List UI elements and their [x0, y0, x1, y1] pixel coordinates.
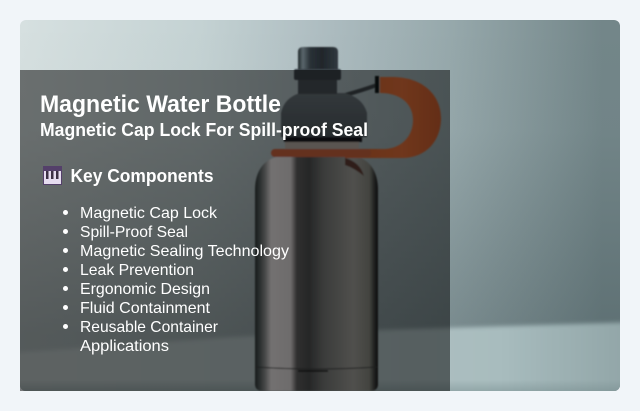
- bullet list: Reusable Container: [80, 319, 219, 336]
- translucent text panel: [20, 70, 450, 391]
- bullet list: Spill-Proof Seal: [80, 224, 188, 241]
- table surface: [20, 320, 620, 391]
- handle connector: [345, 85, 377, 95]
- neck: [298, 79, 337, 94]
- cap collar: [294, 69, 341, 80]
- bullet list: Leak Prevention: [80, 262, 194, 279]
- bullet list: Magnetic Sealing Technology: [80, 243, 289, 260]
- bullet list: Fluid Containment: [80, 300, 211, 317]
- subtitle: Magnetic Cap Lock For Spill-proof Seal: [40, 120, 368, 140]
- cap top: [298, 47, 338, 69]
- bottle reflection under ring: [345, 158, 364, 176]
- lid dome: [281, 93, 367, 137]
- bullet list: Ergonomic Design: [80, 281, 210, 298]
- bottle body: [255, 156, 378, 391]
- bullet list: Applications: [80, 338, 169, 355]
- orange handle: [345, 77, 441, 158]
- section heading: key components: Key Components: [70, 166, 214, 186]
- bullet list: Magnetic Cap Lock: [80, 205, 218, 222]
- lid neck band: [284, 137, 362, 142]
- bullet list: [63, 205, 289, 355]
- icon: piano keys: [43, 166, 62, 185]
- orange ring: [271, 149, 371, 157]
- title: Magnetic Water Bottle: [40, 91, 281, 118]
- water bottle: [255, 47, 441, 391]
